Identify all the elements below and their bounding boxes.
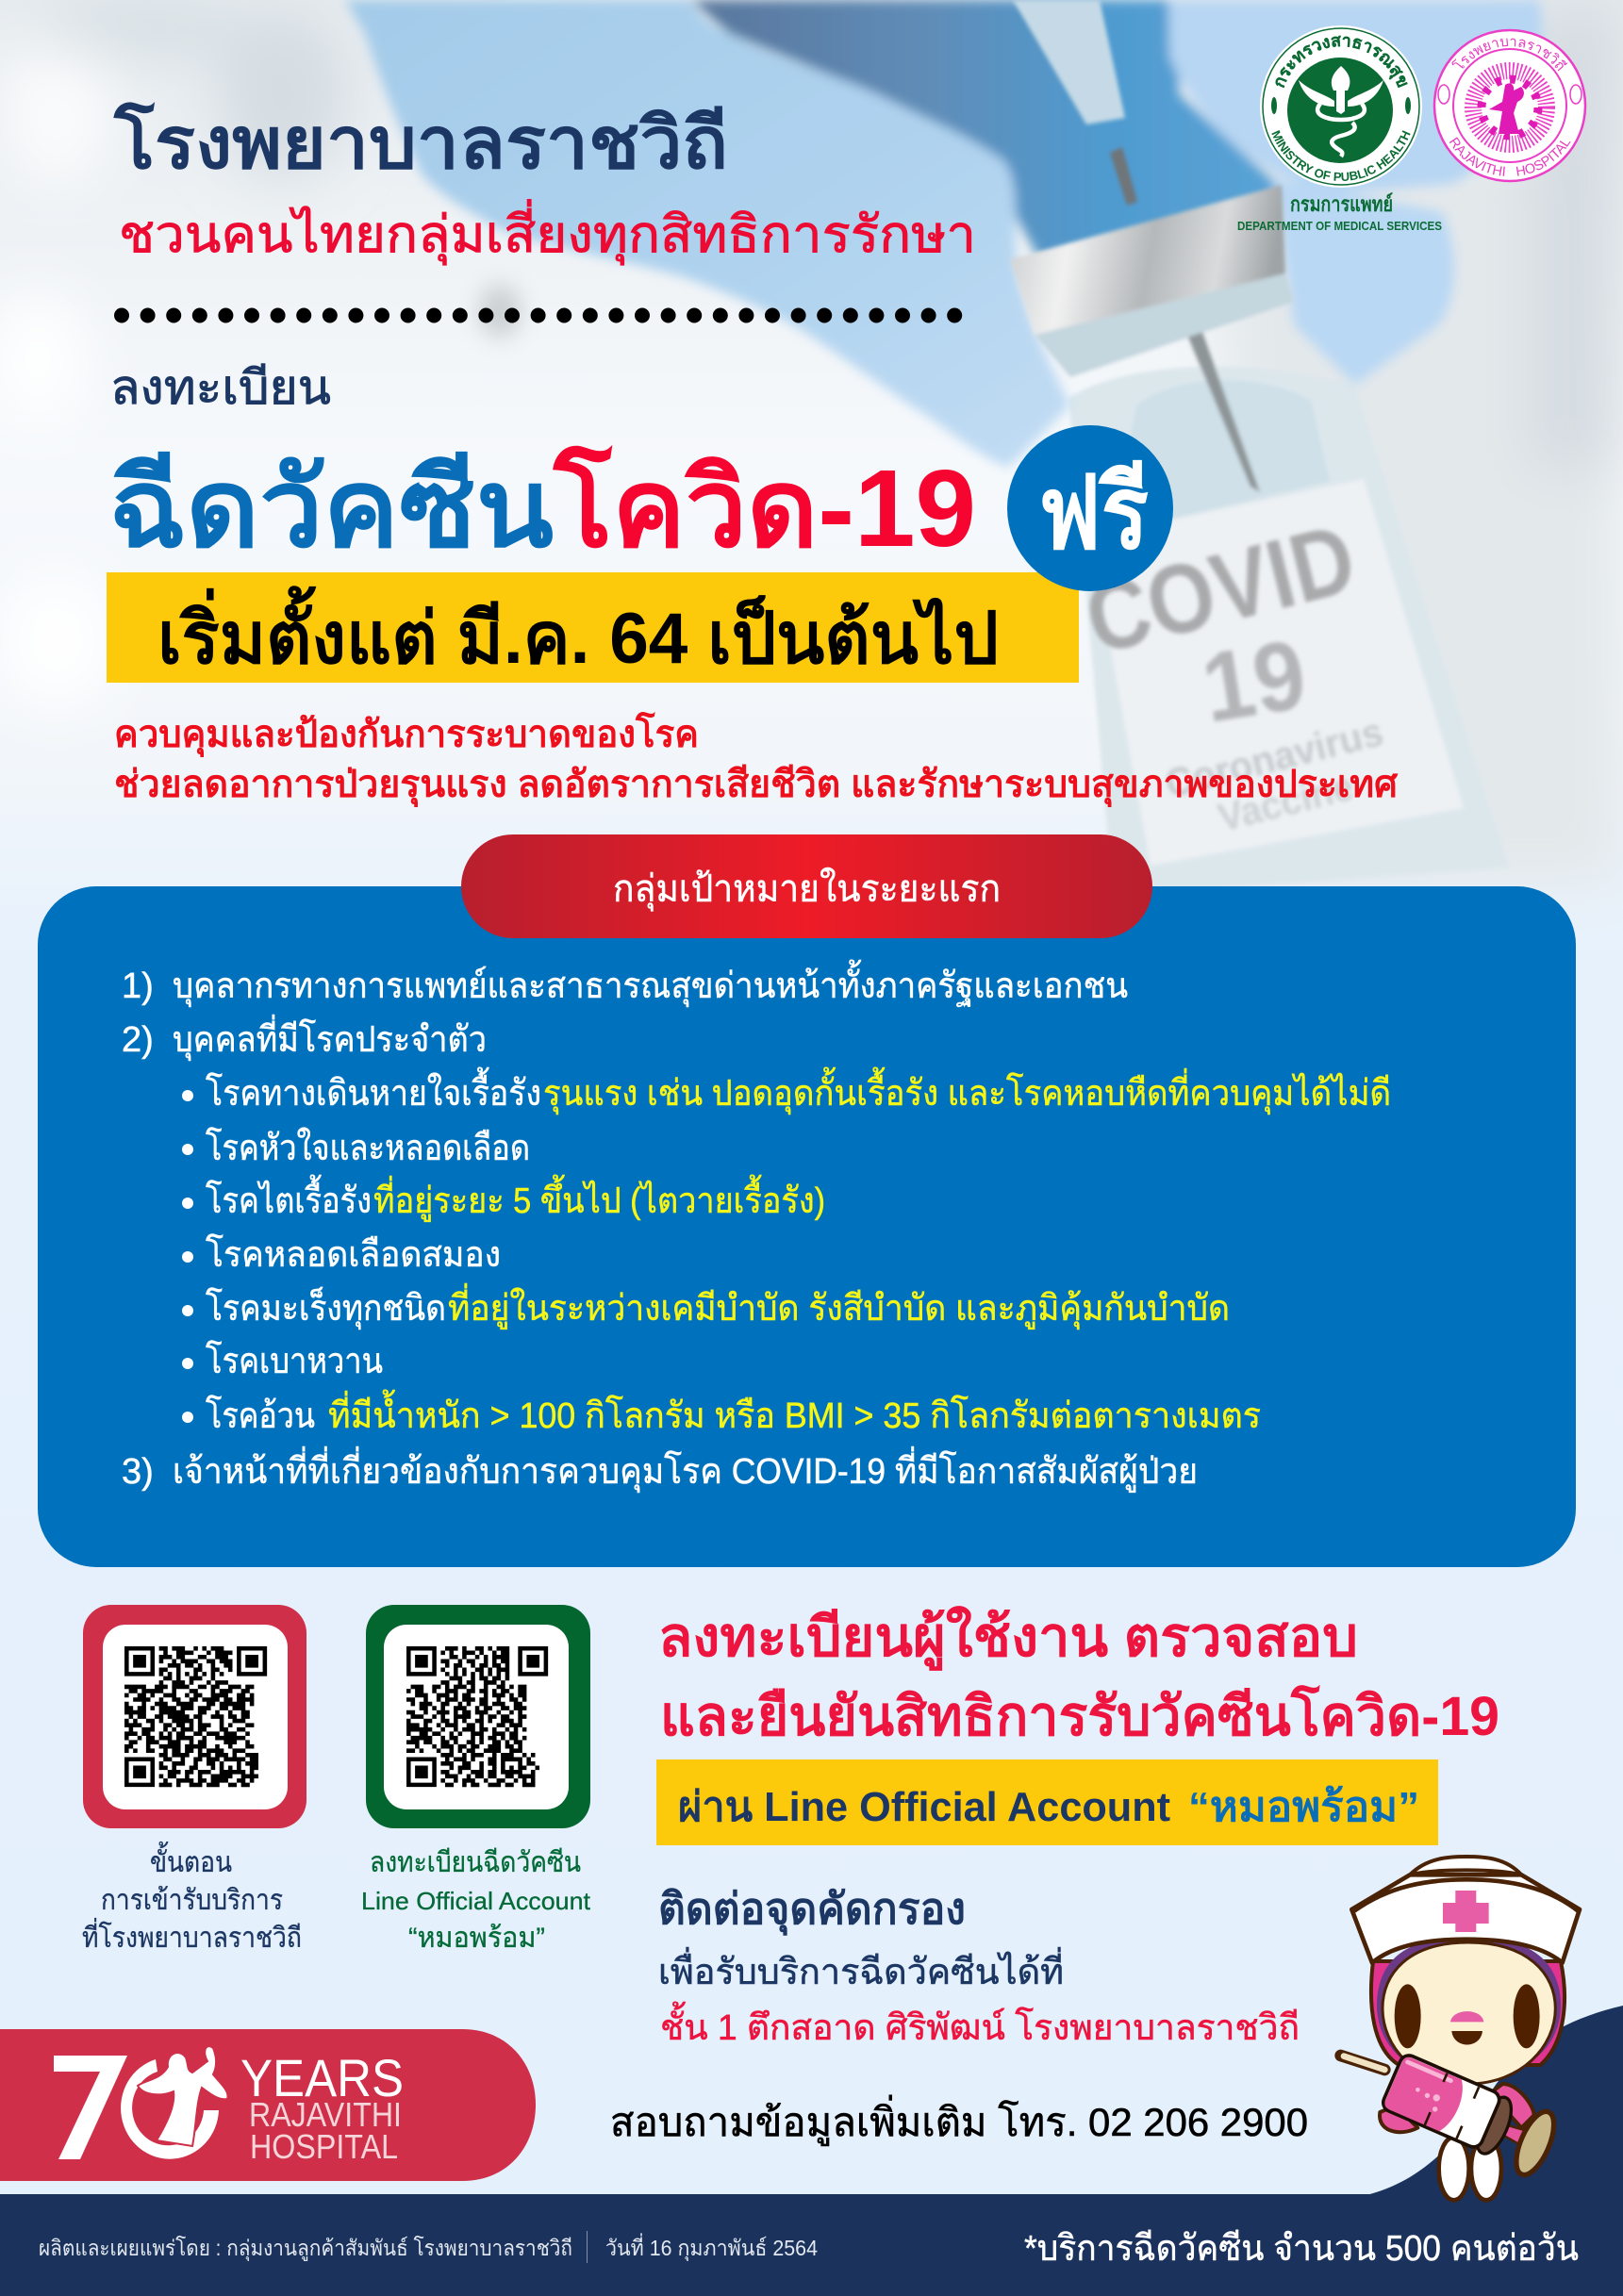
- navy wave: [1358, 2006, 1623, 2296]
- list of target groups: 2): [122, 1020, 154, 1060]
- pill heading: [461, 834, 1152, 938]
- list of target groups: โรคทางเดินหายใจเรื้อรัง: [206, 1066, 541, 1114]
- list of target groups: เจ้าหน้าที่ที่เกี่ยวข้องกับการควบคุมโรค COVID-19 ที่มีโอกาสสัมผัสผู้ป่วย: [173, 1446, 1198, 1493]
- contact screening point: เพื่อรับบริการฉีดวัคซีนได้ที่: [658, 1947, 1064, 1992]
- registration heading: [658, 1605, 1499, 1747]
- yellow line official account band: ผ่าน Line Official Account: [678, 1784, 1170, 1830]
- contact screening point: ชั้น 1 ตึกสอาด ศิริพัฒน์ โรงพยาบาลราชวิถี: [660, 2001, 1300, 2048]
- dotted divider: [122, 307, 956, 322]
- vial label text: 19: [1195, 619, 1313, 744]
- main headline: โควิด-19: [553, 445, 976, 570]
- banner: 70 years Rajavithi hospital: RAJAVITHI: [249, 2095, 402, 2134]
- list of target groups: โรคหัวใจและหลอดเลือด: [206, 1127, 530, 1168]
- title: โรงพยาบาลราชวิถี: [113, 101, 728, 184]
- phone enquiry: สอบถามข้อมูลเพิ่มเติม โทร. 02 206 2900: [610, 2095, 1308, 2146]
- QR card: Line official account: [361, 1605, 591, 1954]
- list of target groups: ที่มีน้ำหนัก > 100 กิโลกรัม หรือ BMI > 35 กิโลกรัมต่อตารางเมตร: [328, 1389, 1261, 1436]
- list of target groups: [122, 959, 1391, 1493]
- list of target groups: โรคอ้วน: [206, 1395, 315, 1436]
- logo: Ministry of Public Health: กระทรวงสาธารณสุข: [1275, 36, 1408, 89]
- purpose text: ช่วยลดอาการป่วยรุนแรง ลดอัตราการเสียชีวิต และรักษาระบบสุขภาพของประเทศ: [114, 764, 1399, 808]
- free badge: ฟรี: [1038, 455, 1149, 570]
- logo caption: department of medical services: [1237, 192, 1442, 233]
- pill heading: กลุ่มเป้าหมายในระยะแรก: [613, 867, 1001, 912]
- caption: ลงทะเบียนฉีดวัคซีน: [370, 1847, 581, 1878]
- caption: [361, 1847, 591, 1954]
- QR card: hospital steps: [82, 1605, 306, 1954]
- caption: การเข้ารับบริการ: [101, 1885, 283, 1916]
- list of target groups: รุนแรง เช่น ปอดอุดกั้นเรื้อรัง และโรคหอบหืดที่ควบคุมได้ไม่ดี: [543, 1066, 1391, 1115]
- list of target groups: โรคไตเรื้อรัง: [206, 1174, 372, 1221]
- caption: Line Official Account: [361, 1887, 591, 1915]
- list of target groups: โรคหลอดเลือดสมอง: [206, 1233, 501, 1275]
- icon: nurse mascot with syringe: [1341, 1857, 1580, 2200]
- banner: 70 years Rajavithi hospital: HOSPITAL: [250, 2127, 398, 2166]
- logo: Ministry of Public Health: [1260, 25, 1422, 188]
- banner: 70 years Rajavithi hospital: YEARS: [240, 2048, 404, 2107]
- vial label text: Vaccine: [1214, 764, 1358, 840]
- logo: Rajavithi Hospital: โรงพยาบาลราชวิถี: [1452, 38, 1567, 72]
- list of target groups: บุคคลที่มีโรคประจำตัว: [173, 1015, 487, 1061]
- caption: [82, 1842, 302, 1954]
- yellow date band: เริ่มตั้งแต่ มี.ค. 64 เป็นต้นไป: [157, 586, 999, 679]
- subtitle: ชวนคนไทยกลุ่มเสี่ยงทุกสิทธิการรักษา: [119, 199, 976, 266]
- logo: Ministry of Public Health: MINISTRY OF PUBLIC HEALTH: [1271, 130, 1411, 181]
- list of target groups: โรคมะเร็งทุกชนิด: [206, 1286, 446, 1330]
- list of target groups: โรคเบาหวาน: [206, 1340, 383, 1381]
- list of target groups: ที่อยู่ระยะ 5 ขึ้นไป (ไตวายเรื้อรัง): [373, 1174, 825, 1222]
- contact screening point: [658, 1884, 1300, 2048]
- caption: “หมอพร้อม”: [408, 1923, 545, 1954]
- list of target groups: 1): [122, 966, 154, 1006]
- footer bar: *บริการฉีดวัคซีน จำนวน 500 คนต่อวัน: [1024, 2229, 1579, 2269]
- contact screening point: ติดต่อจุดคัดกรอง: [658, 1884, 966, 1936]
- yellow line official account band: “หมอพร้อม”: [1188, 1784, 1419, 1830]
- logo: Rajavithi Hospital: RAJAVITHI HOSPITAL: [1449, 138, 1571, 176]
- list of target groups: บุคลากรทางการแพทย์และสาธารณสุขด่านหน้าทั้งภาครัฐและเอกชน: [173, 959, 1128, 1007]
- footer bar: [0, 2194, 1623, 2296]
- register heading: ลงทะเบียน: [110, 361, 331, 414]
- logo: Rajavithi Hospital: [1433, 28, 1586, 183]
- footer bar: ผลิตและเผยแพร่โดย : กลุ่มงานลูกค้าสัมพันธ์ โรงพยาบาลราชวิถี: [39, 2236, 572, 2261]
- main headline: ฉีดวัคซีน: [108, 447, 554, 570]
- footer bar: วันที่ 16 กุมภาพันธ์ 2564: [605, 2233, 818, 2261]
- vial label text: [1076, 504, 1387, 840]
- list of target groups: 3): [122, 1452, 154, 1492]
- yellow date band: [107, 572, 1079, 683]
- caption: ขั้นตอน: [150, 1842, 232, 1878]
- logo caption: department of medical services: กรมการแพทย์: [1290, 192, 1393, 216]
- vial label text: COVID: [1076, 504, 1366, 675]
- main headline: [108, 445, 976, 570]
- free badge: [1007, 425, 1173, 591]
- list of target groups: ที่อยู่ในระหว่างเคมีบำบัด รังสีบำบัด และภูมิคุ้มกันบำบัด: [448, 1283, 1230, 1330]
- vial label text: Coronavirus: [1161, 709, 1387, 806]
- logo caption: department of medical services: DEPARTMENT OF MEDICAL SERVICES: [1237, 220, 1442, 233]
- registration heading: และยืนยันสิทธิการรับวัคซีนโควิด-19: [660, 1683, 1499, 1747]
- purpose text: ควบคุมและป้องกันการระบาดของโรค: [114, 712, 699, 758]
- caption: ที่โรงพยาบาลราชวิถี: [82, 1918, 302, 1954]
- yellow line official account band: [656, 1759, 1438, 1845]
- purpose text: [114, 712, 1399, 808]
- registration heading: ลงทะเบียนผู้ใช้งาน ตรวจสอบ: [658, 1605, 1358, 1671]
- panel: target groups: [38, 834, 1576, 1567]
- banner: 70 years Rajavithi hospital: [0, 2029, 536, 2181]
